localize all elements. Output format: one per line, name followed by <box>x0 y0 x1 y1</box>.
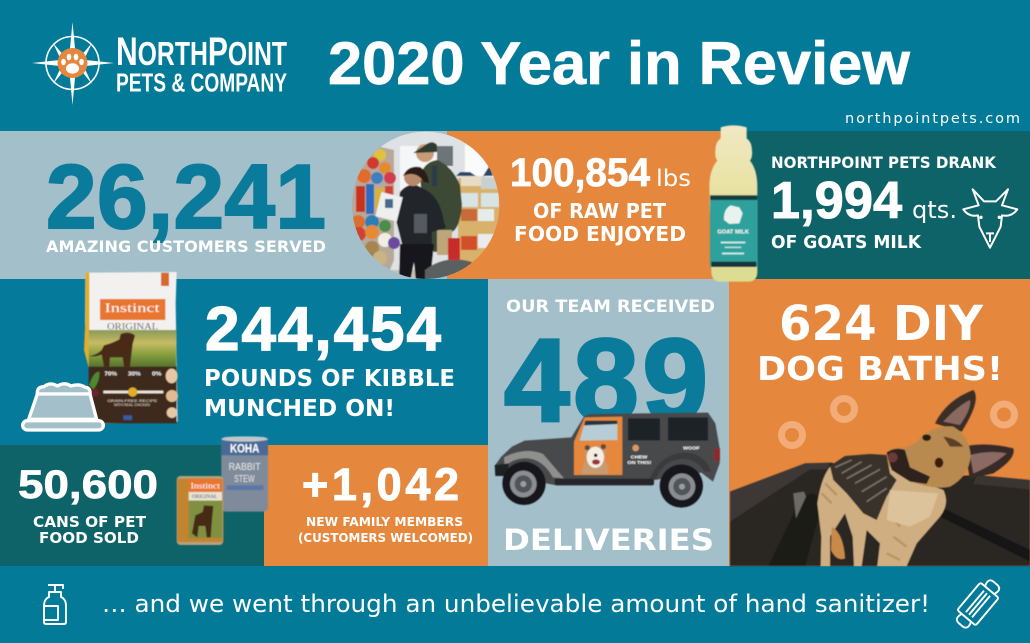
jeep door slogan <box>627 455 652 466</box>
image: kibble bag: 0% <box>152 371 162 377</box>
image: goat milk bottle: GOAT MILK <box>717 229 750 235</box>
caption top: NORTHPOINT PETS DRANK <box>771 153 997 172</box>
caption line 2: FOOD ENJOYED <box>514 222 686 246</box>
dog ears <box>935 390 976 432</box>
can: Koha rabbit stew: RABBIT <box>229 462 261 473</box>
panel: dog baths background <box>729 279 1030 566</box>
image: kibble bag: 70% <box>104 371 117 377</box>
image: delivery jeep <box>495 413 720 508</box>
can: Instinct original: Instinct <box>191 481 221 490</box>
number: +1,042 <box>302 459 459 510</box>
caption bottom: OF GOATS MILK <box>771 232 922 253</box>
number: 1,994 <box>771 172 902 230</box>
caption line 2: FOOD SOLD <box>39 529 139 547</box>
stat: cans sold <box>18 463 158 547</box>
caption top: OUR TEAM RECEIVED <box>506 297 715 317</box>
image: kibble bag: GRAIN-FREE RECIPE <box>107 398 158 403</box>
icon: compass with paw <box>32 22 114 105</box>
photo: customers shopping in store <box>350 130 503 284</box>
stat: raw pet food <box>510 151 691 246</box>
title: 2020 Year in Review <box>328 30 910 97</box>
wheel: rear <box>660 464 703 508</box>
logo tagline: PETS & COMPANY <box>116 68 287 98</box>
jeep door slogan: CHEW <box>631 455 648 461</box>
icon: food bowl <box>23 384 103 430</box>
number: 50,600 <box>18 463 158 507</box>
image: kibble bag: ORIGINAL <box>107 322 159 332</box>
footer band <box>0 566 1030 643</box>
caption bottom: DELIVERIES <box>503 523 714 557</box>
header band <box>0 0 1030 131</box>
footer message: … and we went through an unbelievable amount of hand sanitizer! <box>102 590 930 618</box>
image: kibble bag: WITH REAL CHICKEN <box>114 403 151 407</box>
panel: goats milk background <box>733 131 1030 279</box>
caption line 2: MUNCHED ON! <box>204 396 395 422</box>
panel: kibble background <box>0 279 488 445</box>
can: Koha rabbit stew <box>221 436 268 512</box>
number: 624 DIY <box>779 296 984 352</box>
logo <box>32 22 287 105</box>
icon: face mask <box>951 576 1005 632</box>
man <box>420 160 462 252</box>
bubbles <box>782 398 1014 446</box>
panel: customers background <box>0 131 448 279</box>
stat: goats milk <box>771 153 997 253</box>
caption line 1: OF RAW PET <box>533 199 666 223</box>
can: Koha rabbit stew: STEW <box>234 474 255 485</box>
image: kibble bag: 30% <box>128 371 141 377</box>
caption: DOG BATHS! <box>757 349 1003 388</box>
panel: deliveries background <box>488 279 729 566</box>
image: kibble bag <box>84 272 178 424</box>
stat: dog baths <box>757 296 1003 388</box>
dog head <box>887 426 971 488</box>
can: Koha rabbit stew: KOHA <box>230 442 260 456</box>
stat: kibble <box>204 295 455 422</box>
stat: deliveries <box>503 297 715 557</box>
image: goat milk bottle <box>709 125 757 282</box>
icon: hand sanitizer bottle <box>44 585 66 624</box>
dog body <box>817 455 946 566</box>
woman <box>396 185 446 244</box>
wheel: front <box>502 462 546 505</box>
can: Instinct original: ORIGINAL <box>192 495 217 500</box>
caption: AMAZING CUSTOMERS SERVED <box>46 237 326 256</box>
jeep door slogan: ON THIS! <box>627 460 652 466</box>
caption line 1: POUNDS OF KIBBLE <box>204 366 455 392</box>
stat: new family members <box>298 459 473 545</box>
caption line 2: (CUSTOMERS WELCOMED) <box>298 530 473 545</box>
panel: raw food background <box>447 131 734 279</box>
image: kibble bag: Instinct <box>105 301 160 315</box>
jeep rear text: WOOF <box>683 445 700 450</box>
panel: cans background <box>0 445 264 566</box>
number: 489 <box>504 315 708 447</box>
number: 244,454 <box>205 295 442 364</box>
number: 26,241 <box>46 147 326 248</box>
photo: wet dog in bath tub <box>730 390 1030 566</box>
can: Instinct original <box>177 476 223 545</box>
icon: goat head <box>963 189 1017 248</box>
unit: lbs <box>656 166 691 192</box>
image: pet food cans <box>177 436 268 545</box>
stat: customers served <box>46 147 326 256</box>
caption line 1: CANS OF PET <box>33 513 146 531</box>
caption line 1: NEW FAMILY MEMBERS <box>306 514 463 529</box>
number: 100,854 <box>510 151 651 195</box>
bulldog on door <box>581 444 609 474</box>
unit: qts. <box>912 196 957 224</box>
website url: northpointpets.com <box>845 111 1020 127</box>
tub <box>730 463 1030 566</box>
panel: new family members background <box>264 445 488 566</box>
logo wordmark: NORTHPOINT <box>116 30 287 74</box>
